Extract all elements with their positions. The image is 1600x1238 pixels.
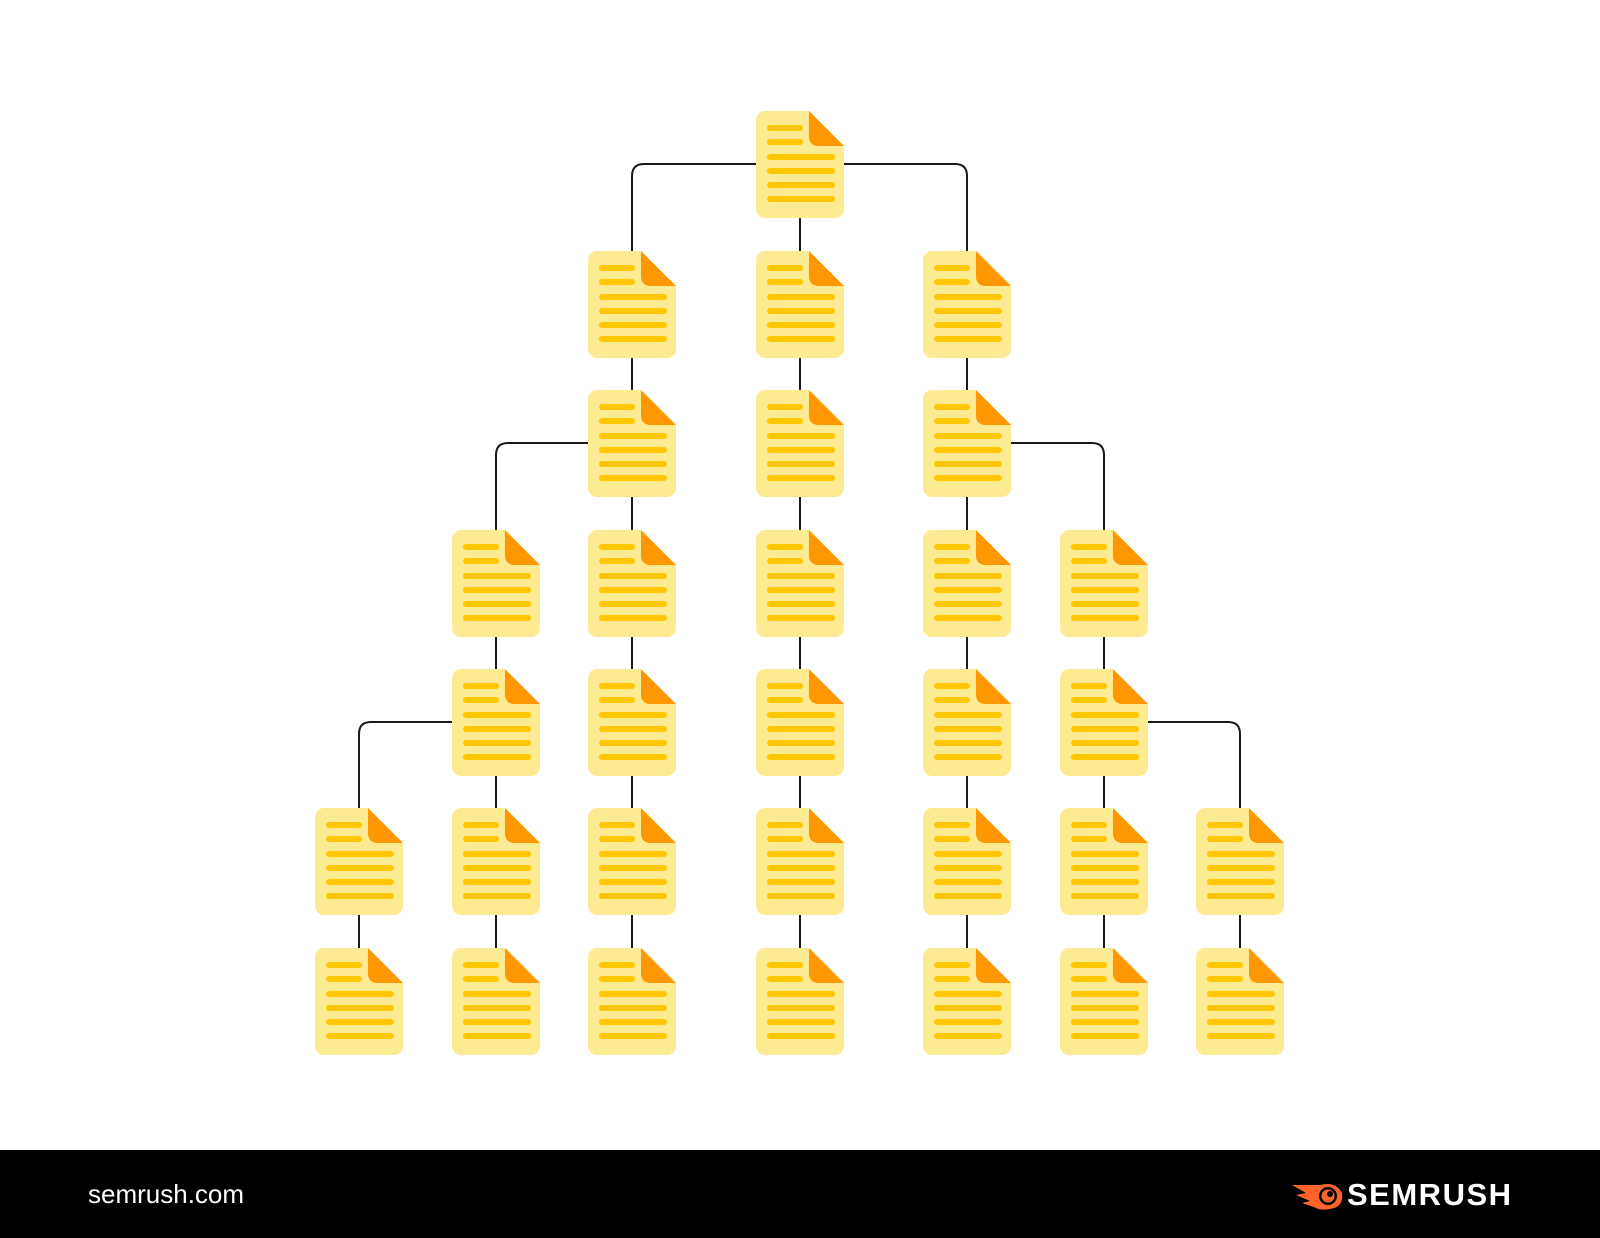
footer bar bbox=[0, 1150, 1600, 1238]
documents bbox=[315, 111, 1284, 1055]
footer text: semrush.com: semrush.com bbox=[88, 1179, 244, 1209]
logo: semrush bbox=[1292, 1177, 1513, 1212]
connectors bbox=[359, 164, 1240, 948]
icon: flame bbox=[1292, 1184, 1342, 1210]
wordmark: SEMRUSH bbox=[1347, 1177, 1513, 1212]
